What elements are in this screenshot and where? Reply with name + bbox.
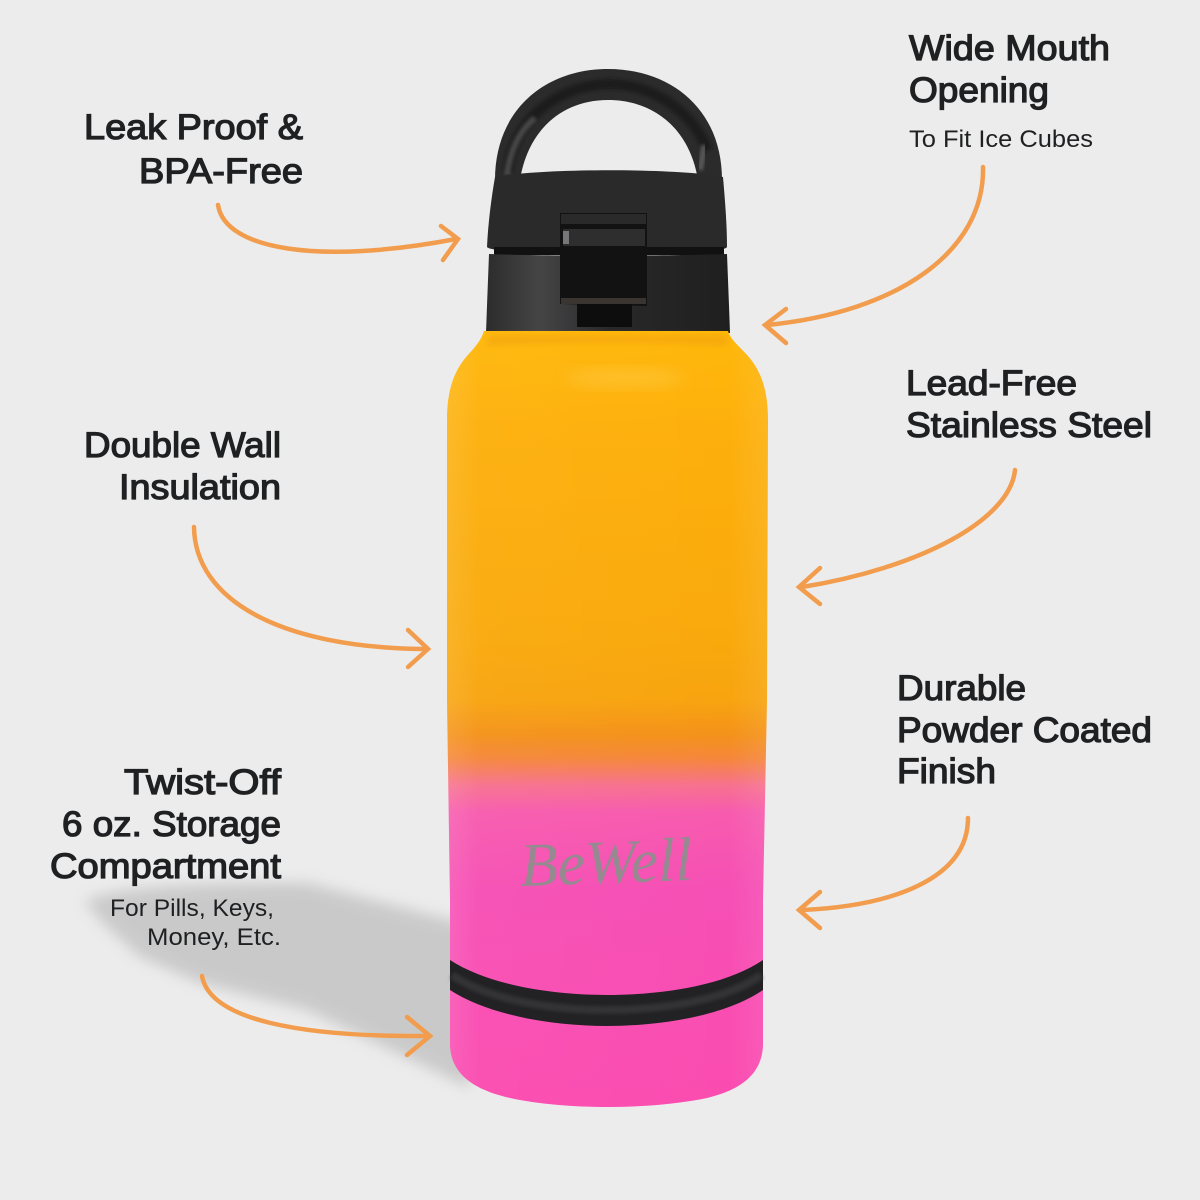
label: lead-free xyxy=(906,364,1152,445)
lid clip xyxy=(560,213,647,327)
label: twist-off xyxy=(50,763,281,951)
neck band xyxy=(486,335,728,346)
label: leak proof: Leak Proof & xyxy=(84,108,303,147)
body shading xyxy=(447,331,768,1107)
arrow: leak proof xyxy=(218,205,458,260)
label: twist-off: Money, Etc. xyxy=(147,924,281,951)
label: twist-off: Compartment xyxy=(50,847,281,886)
label: durable: Finish xyxy=(897,752,996,791)
label: durable xyxy=(897,669,1152,791)
label: leak proof xyxy=(84,108,303,191)
bottle body xyxy=(447,331,768,1107)
label: durable: Durable xyxy=(897,669,1026,708)
base ring xyxy=(450,960,763,1026)
lid gap xyxy=(494,247,724,255)
arrow: wide mouth xyxy=(765,167,983,343)
label: leak proof: BPA-Free xyxy=(139,152,303,191)
label: lead-free: Lead-Free xyxy=(906,364,1077,403)
bottle handle xyxy=(495,69,722,180)
label: lead-free: Stainless Steel xyxy=(906,406,1152,445)
bottle cast shadow xyxy=(85,883,470,1088)
arrow: double wall xyxy=(194,527,428,667)
bottle collar xyxy=(486,254,730,333)
shoulder highlight xyxy=(565,368,685,388)
label: twist-off: For Pills, Keys, xyxy=(110,895,274,922)
label: double wall: Double Wall xyxy=(84,426,281,465)
label: twist-off: 6 oz. Storage xyxy=(62,805,281,844)
bottle xyxy=(447,69,768,1107)
arrow: twist-off xyxy=(202,976,430,1055)
brand logo: BeWell xyxy=(519,826,693,900)
label: durable: Powder Coated xyxy=(897,711,1152,750)
arrow: durable xyxy=(799,818,968,928)
arrow: lead-free xyxy=(799,470,1015,604)
label: twist-off: Twist-Off xyxy=(124,763,281,802)
label: double wall xyxy=(84,426,281,507)
label: wide mouth xyxy=(909,29,1110,153)
bottle lid xyxy=(487,170,727,252)
label: wide mouth: Wide Mouth xyxy=(909,29,1110,68)
label: double wall: Insulation xyxy=(119,468,281,507)
label: wide mouth: Opening xyxy=(909,71,1049,110)
label: wide mouth: To Fit Ice Cubes xyxy=(909,126,1093,153)
